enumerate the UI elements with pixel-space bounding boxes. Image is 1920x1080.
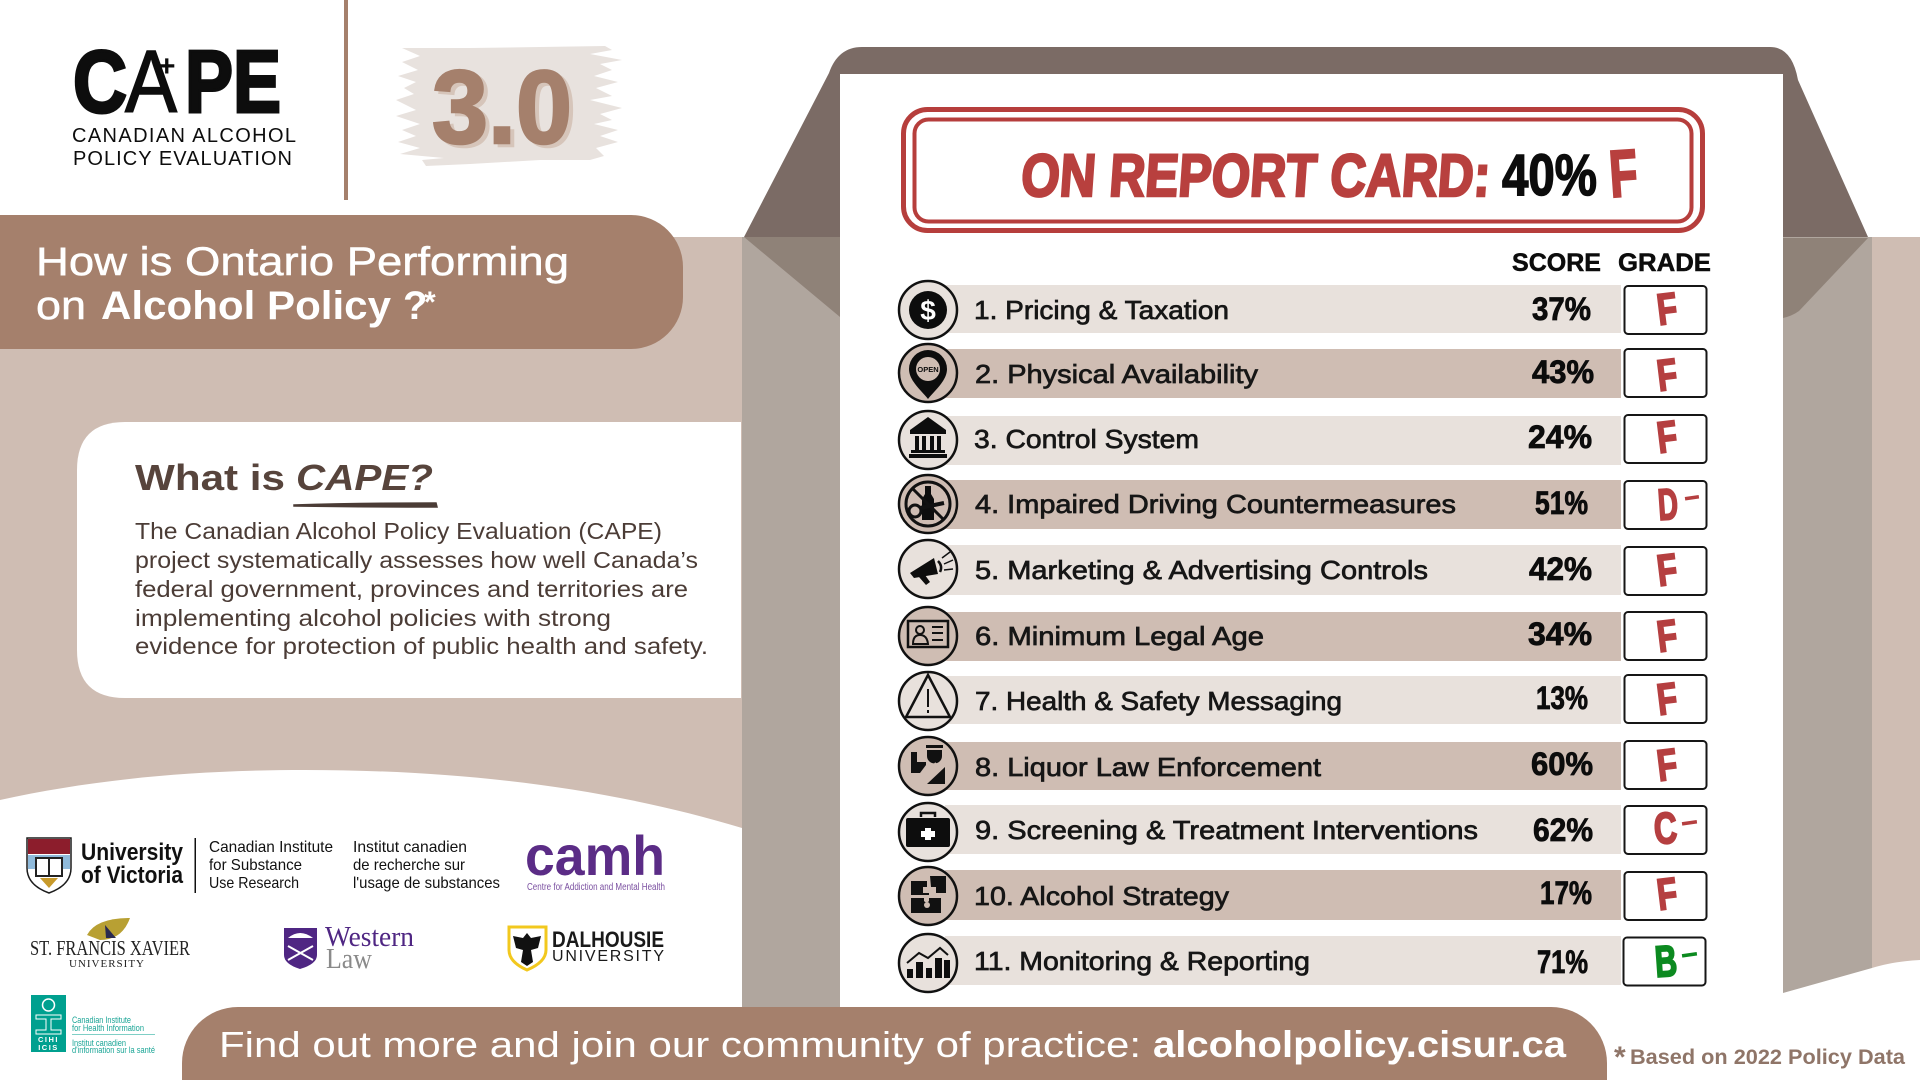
row 4 impaired driving: 51% bbox=[1535, 485, 1588, 521]
row 9 screening and treatment bbox=[899, 803, 1706, 861]
title banner: on bbox=[36, 284, 86, 328]
logo: Canadian Institute for Health Information bbox=[31, 995, 155, 1055]
row 5 marketing: 5. Marketing & Advertising Controls bbox=[975, 555, 1428, 585]
CAPE logo: CANADIAN ALCOHOL bbox=[72, 125, 296, 147]
report card heading stamp: F bbox=[1607, 135, 1640, 211]
logo: Western Law: Western bbox=[325, 922, 414, 953]
logo: Canadian Institute for Substance Use Research: de recherche sur bbox=[353, 857, 466, 874]
icon: no drink driving bbox=[899, 475, 957, 533]
row 8 liquor law enforcement: 60% bbox=[1531, 746, 1593, 782]
body text: evidence for protection of public health and safety. bbox=[135, 633, 708, 659]
row 7 health and safety messaging: 13% bbox=[1536, 680, 1588, 716]
logo: Canadian Institute for Substance Use Research: Use Research bbox=[209, 875, 299, 892]
logo: Canadian Institute for Substance Use Research: Canadian Institute bbox=[209, 839, 333, 856]
CAPE logo: PE bbox=[185, 32, 281, 131]
row 6 minimum legal age: 34% bbox=[1528, 616, 1592, 652]
logo: Canadian Institute for Health Information: Canadian Institute bbox=[72, 1015, 131, 1025]
row 10 alcohol strategy: F bbox=[1654, 869, 1680, 920]
footnote: Based on 2022 Policy Data bbox=[1630, 1046, 1905, 1069]
report card heading stamp bbox=[904, 110, 1702, 230]
row 4 impaired driving: 4. Impaired Driving Countermeasures bbox=[975, 489, 1456, 519]
logo: St. Francis Xavier bbox=[30, 918, 190, 970]
row 2 physical availability: F bbox=[1654, 350, 1680, 401]
row 8 liquor law enforcement: 8. Liquor Law Enforcement bbox=[975, 752, 1322, 782]
logo: University of Victoria: University bbox=[81, 839, 184, 866]
row 1 pricing and taxation: 1. Pricing & Taxation bbox=[974, 295, 1229, 325]
row 6 minimum legal age: 6. Minimum Legal Age bbox=[975, 621, 1264, 651]
row 2 physical availability bbox=[899, 344, 1706, 402]
icon: dollar: $ bbox=[920, 295, 936, 326]
envelope fold left bbox=[744, 237, 840, 317]
envelope fold right bbox=[1783, 238, 1868, 318]
envelope grey band left bbox=[742, 237, 840, 1027]
report card heading stamp: ON REPORT CARD: bbox=[1019, 142, 1493, 209]
footer banner: alcoholpolicy.cisur.ca bbox=[1153, 1024, 1566, 1065]
report card paper bbox=[840, 74, 1783, 1080]
3.0 version badge: 3.0 bbox=[432, 50, 572, 166]
envelope flap bbox=[744, 47, 1868, 237]
row 7 health and safety messaging bbox=[899, 672, 1706, 730]
row 9 screening and treatment: 9. Screening & Treatment Interventions bbox=[975, 815, 1478, 845]
heading: What is bbox=[135, 457, 285, 498]
title banner: How is Ontario Performing bbox=[36, 240, 569, 284]
icon: medical briefcase bbox=[899, 803, 957, 861]
logo: Canadian Institute for Substance Use Research: Institut canadien bbox=[353, 839, 467, 856]
logo: Canadian Institute for Health Information: CIHI bbox=[38, 1035, 59, 1044]
row 5 marketing: 42% bbox=[1529, 551, 1592, 587]
footer banner: Find out more and join our community of practice: bbox=[219, 1024, 1141, 1065]
row 11 monitoring and reporting bbox=[899, 934, 1706, 992]
logo: Canadian Institute for Health Information: Institut canadien bbox=[72, 1038, 126, 1048]
body text: project systematically assesses how well Canada’s bbox=[135, 547, 698, 573]
row 3 control system: 24% bbox=[1528, 419, 1592, 455]
panel: what is CAPE bbox=[77, 422, 741, 698]
heading: CAPE? bbox=[296, 457, 433, 498]
row 3 control system: F bbox=[1654, 412, 1680, 463]
footer banner bbox=[182, 1007, 1607, 1080]
logo: Dalhousie University: DALHOUSIE bbox=[552, 927, 664, 952]
icon: ID card bbox=[899, 607, 957, 665]
logo: Dalhousie University: UNIVERSITY bbox=[552, 948, 664, 965]
envelope grey band right bbox=[1783, 237, 1872, 993]
row 10 alcohol strategy: 17% bbox=[1540, 875, 1592, 911]
logo: Western Law bbox=[284, 922, 414, 975]
row 11 monitoring and reporting: 11. Monitoring & Reporting bbox=[974, 946, 1310, 976]
column headers: GRADE bbox=[1618, 249, 1711, 277]
icon: officer bbox=[899, 737, 957, 795]
3.0 version badge bbox=[396, 46, 622, 169]
row 8 liquor law enforcement bbox=[899, 737, 1706, 795]
logo: camh: camh bbox=[525, 824, 665, 887]
row 9 screening and treatment: 62% bbox=[1533, 812, 1593, 848]
title banner: Alcohol Policy bbox=[101, 284, 392, 328]
CAPE logo: + bbox=[158, 50, 176, 83]
title banner: * bbox=[424, 286, 436, 319]
row 1 pricing and taxation bbox=[899, 281, 1706, 339]
title banner: ? bbox=[403, 284, 427, 328]
logo: Canadian Institute for Health Information: d'information sur la santé bbox=[72, 1045, 155, 1055]
row 10 alcohol strategy: 10. Alcohol Strategy bbox=[974, 881, 1229, 911]
logo: Canadian Institute for Substance Use Research: for Substance bbox=[209, 857, 302, 874]
row 6 minimum legal age: F bbox=[1654, 611, 1680, 662]
row 6 minimum legal age bbox=[899, 607, 1706, 665]
logo: University of Victoria: of Victoria bbox=[81, 862, 184, 889]
logo: St. Francis Xavier: UNIVERSITY bbox=[69, 958, 144, 970]
divider line bbox=[344, 0, 348, 200]
row 8 liquor law enforcement: F bbox=[1654, 740, 1680, 791]
row 9 screening and treatment: C bbox=[1652, 803, 1679, 854]
body text: The Canadian Alcohol Policy Evaluation (CAPE) bbox=[135, 518, 662, 544]
body text: implementing alcohol policies with strong bbox=[135, 605, 611, 631]
logo: University of Victoria bbox=[27, 838, 196, 893]
logo: camh: Centre for Addiction and Mental Health bbox=[527, 882, 665, 893]
logo: Dalhousie University bbox=[509, 927, 664, 970]
title banner bbox=[0, 215, 683, 349]
row 11 monitoring and reporting: 71% bbox=[1537, 944, 1588, 980]
CAPE logo: C bbox=[73, 32, 127, 131]
logo: Western Law: Law bbox=[326, 944, 373, 975]
logo: Canadian Institute for Substance Use Research: l'usage de substances bbox=[353, 875, 500, 892]
row 2 physical availability: 2. Physical Availability bbox=[975, 359, 1258, 389]
icon: bank building bbox=[899, 411, 957, 469]
logo: Canadian Institute for Substance Use Research bbox=[209, 839, 500, 892]
row 3 control system bbox=[899, 411, 1706, 469]
row 2 physical availability: 43% bbox=[1532, 354, 1594, 390]
row 10 alcohol strategy bbox=[899, 867, 1706, 925]
icon: rising bar chart bbox=[899, 934, 957, 992]
CAPE logo: A bbox=[125, 32, 177, 131]
report card heading stamp: 40% bbox=[1502, 143, 1597, 208]
row 5 marketing bbox=[899, 540, 1706, 598]
row 4 impaired driving: D bbox=[1656, 480, 1680, 530]
row 1 pricing and taxation: F bbox=[1654, 284, 1680, 335]
icon: puzzle bbox=[899, 867, 957, 925]
background tan panel right bbox=[1872, 237, 1920, 968]
icon: warning triangle bbox=[899, 672, 957, 730]
footnote: * bbox=[1614, 1041, 1626, 1074]
body text: federal government, provinces and territories are bbox=[135, 576, 688, 602]
row 11 monitoring and reporting: B bbox=[1653, 937, 1679, 987]
row 4 impaired driving bbox=[899, 475, 1706, 533]
logo: St. Francis Xavier: ST. FRANCIS XAVIER bbox=[30, 936, 190, 960]
row 1 pricing and taxation: 37% bbox=[1532, 291, 1591, 327]
row 7 health and safety messaging: 7. Health & Safety Messaging bbox=[975, 686, 1342, 716]
footnote bbox=[1614, 1041, 1905, 1074]
column headers: SCORE bbox=[1512, 249, 1601, 277]
logo: Canadian Institute for Health Information: for Health Information bbox=[72, 1023, 144, 1033]
body text bbox=[135, 518, 708, 659]
row 5 marketing: F bbox=[1654, 545, 1680, 596]
row 7 health and safety messaging: F bbox=[1654, 674, 1680, 725]
background tan panel left bbox=[0, 237, 742, 828]
icon: megaphone bbox=[899, 540, 957, 598]
column headers bbox=[1512, 249, 1711, 277]
3.0 version badge: 3.0 bbox=[436, 53, 576, 169]
row 3 control system: 3. Control System bbox=[974, 424, 1199, 454]
logo: Canadian Institute for Health Information: ICIS bbox=[38, 1043, 59, 1052]
heading bbox=[135, 457, 437, 507]
CAPE logo: POLICY EVALUATION bbox=[73, 148, 292, 170]
icon: open map pin: OPEN bbox=[917, 365, 939, 374]
CAPE logo bbox=[72, 32, 296, 170]
icon: open map pin bbox=[899, 344, 957, 402]
icon: dollar bbox=[899, 281, 957, 339]
